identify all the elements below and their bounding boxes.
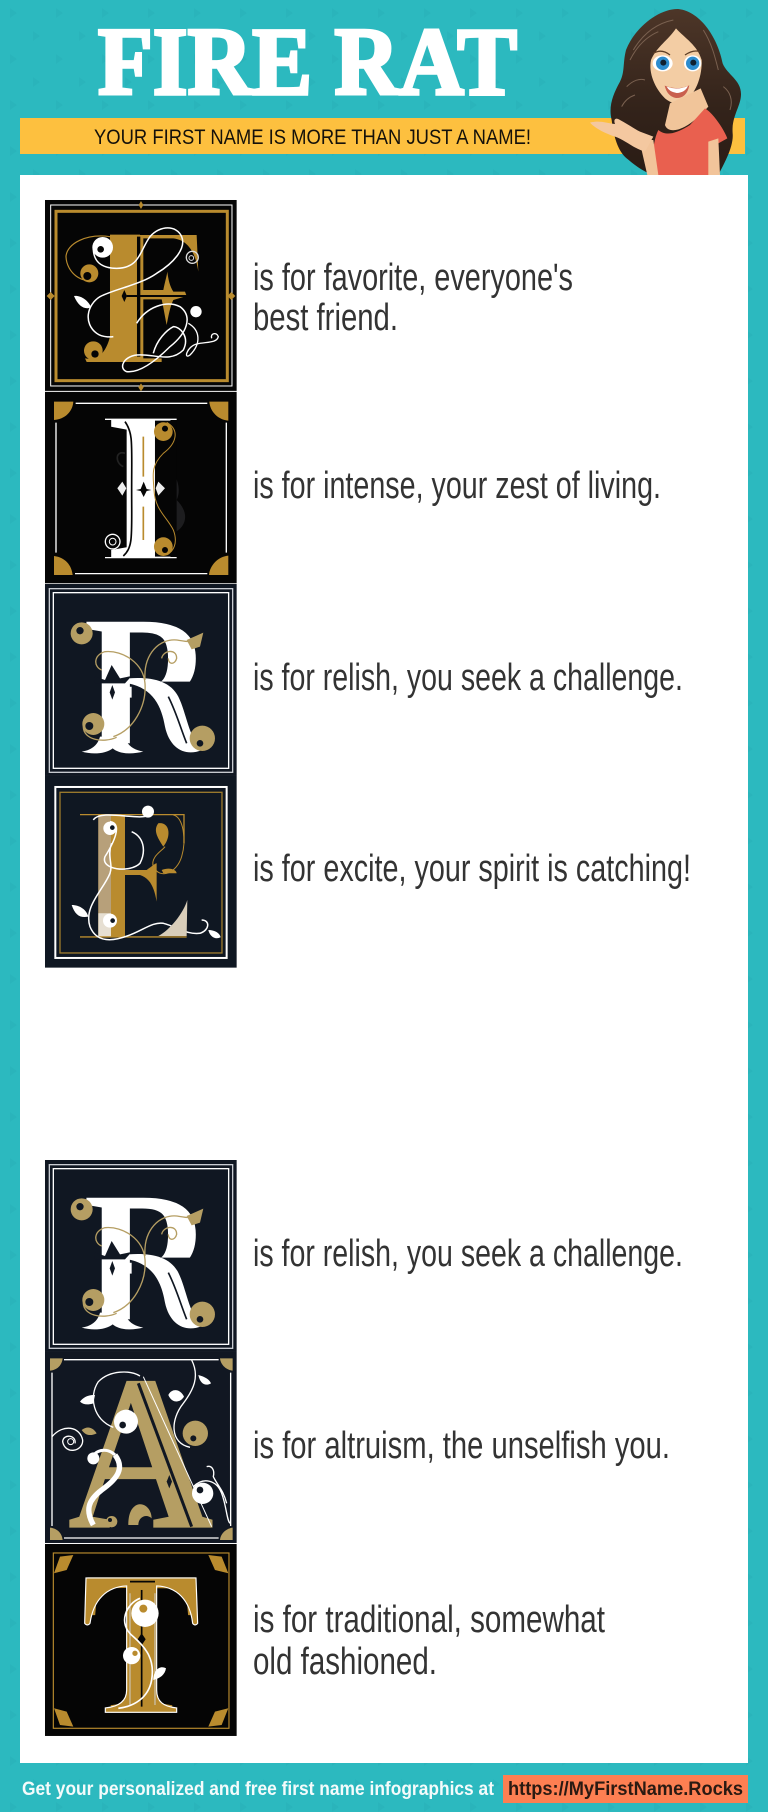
row 7: definition text (253, 1599, 605, 1683)
row 5: letter R tile: R (83, 1151, 217, 1373)
character illustration (590, 9, 741, 175)
footer url badge: https://MyFirstName.Rocks (508, 1779, 743, 1800)
footer call to action: Get your personalized and free first name infographics at (22, 1779, 495, 1800)
row 7: definition text: is for traditional, somewhat (253, 1599, 605, 1641)
row 2: letter I tile (45, 370, 237, 604)
subtitle banner (20, 118, 745, 154)
row 5: letter R tile (45, 1160, 237, 1352)
row 7: letter T tile: T (85, 1529, 198, 1758)
row 4: letter E tile: E (77, 770, 184, 978)
row 2: letter I tile: I (105, 370, 177, 604)
row 3: letter R tile (45, 584, 237, 776)
row 1: letter F tile: F (92, 189, 205, 404)
row 6: letter A tile: A (67, 1331, 214, 1577)
row 1: letter F tile (45, 200, 237, 392)
row 4: letter E tile (45, 770, 237, 978)
title: FIRE RAT (98, 8, 517, 115)
row 7: definition text: old fashioned. (253, 1641, 437, 1683)
subtitle banner: YOUR FIRST NAME IS MORE THAN JUST A NAME! (94, 126, 531, 149)
row 3: letter R tile: R (83, 575, 217, 797)
row 1: definition text: is for favorite, everyone's (253, 257, 573, 299)
row 1: definition text: best friend. (253, 297, 398, 339)
row 1: definition text (253, 257, 573, 339)
